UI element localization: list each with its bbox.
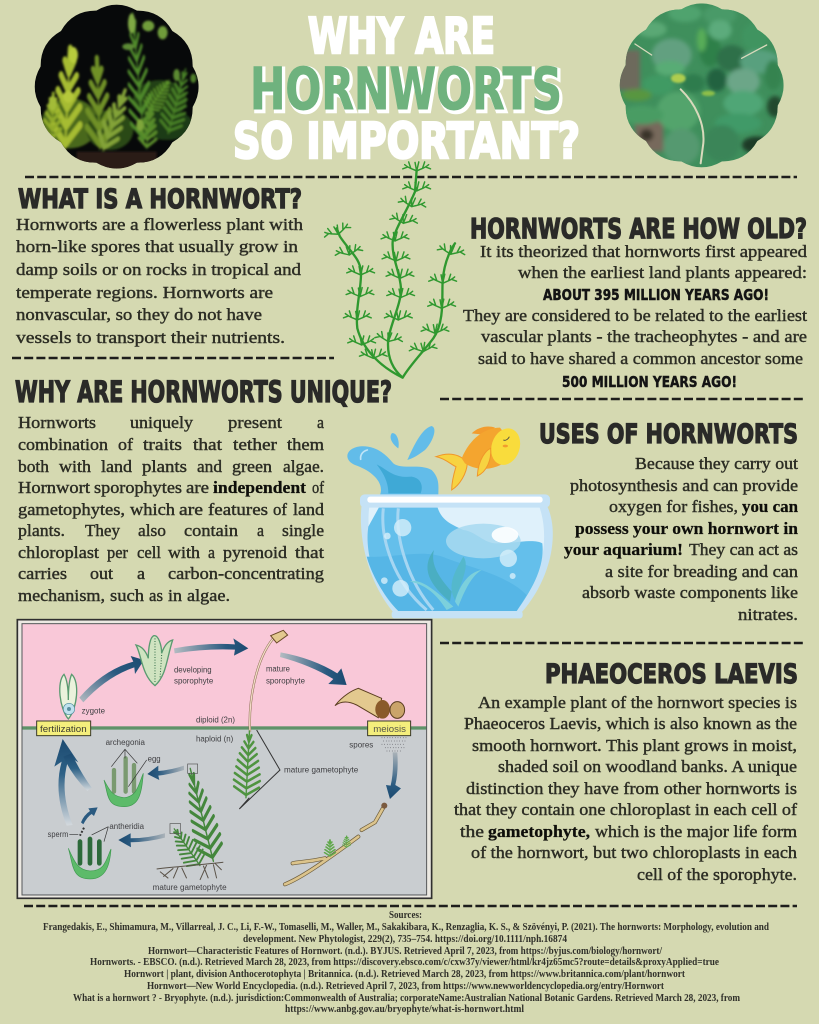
sources: What is a hornwort ? - Bryophyte. (n.d.). jurisdiction:Commonwealth of Australia; corporateName:Australian National Botanic Gardens. Retrieved March 28, 2023, from [73,993,741,1004]
body text: what is a hornwort: temperate regions. Hornworts are [16,283,273,302]
archegonia cup [104,749,147,807]
body text: what is a hornwort: Hornworts are a flowerless plant with [16,215,304,234]
panel: hornworts are how old [463,212,808,391]
body text: what is a hornwort [16,215,304,347]
stage label: meiosis [368,721,411,736]
photo: hornwort on black background [34,4,199,169]
body text: why are hornworts unique: of [118,435,133,454]
opened spore capsule [335,688,405,719]
panel: uses of hornworts [539,419,799,624]
body text: why are hornworts unique: a [137,564,145,583]
body text: why are hornworts unique: cell [137,543,161,562]
body text: what is a hornwort: horn-like spores that usually grow in [16,237,299,256]
body text: phaeoceros laevis [454,693,798,884]
title line: so important: SO IMPORTANT? [233,113,580,170]
body text: why are hornworts unique: also [138,521,166,540]
body text: why are hornworts unique: with [168,543,201,562]
diagram labels: mature [266,665,291,674]
mature sporophyte stalk and capsule [250,630,288,732]
body text: why are hornworts unique [18,413,325,605]
body text: why are hornworts unique: mechanism, [18,586,105,605]
diagram labels: sporophyte [174,676,214,685]
life-cycle arrows [54,638,401,847]
diagram labels: diploid (2n) [196,715,235,724]
body text: hornworts are how old: said to have shared a common ancestor some [478,349,803,368]
body text: why are hornworts unique: uniquely [130,413,194,432]
title line: hornworts: HORNWORTS [252,57,564,125]
body text: why are hornworts unique: sporophytes [94,478,182,497]
panel: why are hornworts unique [15,375,392,605]
sources: Hornworts. - EBSCO. (n.d.). Retrieved March 28, 2023, from https://discovery.ebsco.com/c/cxw37y/viewer/html/kr4jz65mc5?route=details&proxyApplied=true [90,957,720,968]
body text: uses of hornworts: Because they carry out [635,454,798,473]
body text: phaeoceros laevis: of the hornwort, but two chloroplasts in each [471,843,798,862]
diagram labels [48,665,373,892]
body text: hornworts are how old: vascular plants - the tracheophytes - and are [481,327,807,346]
body text: why are hornworts unique: of [273,500,287,519]
body text: why are hornworts unique: combination [18,435,109,454]
body text: phaeoceros laevis: which is the major life form [595,822,797,841]
diagram labels: haploid (n) [196,735,234,744]
diagram labels: mature gametophyte [284,765,359,774]
body text: why are hornworts unique: a [317,413,324,432]
title line: hornworts: HORNWORTS [250,55,562,123]
body text: why are hornworts unique: contain [184,521,239,540]
body text: why are hornworts unique: tether [233,435,277,454]
panel: phaeoceros laevis [454,659,798,884]
developing sporophyte [136,636,173,686]
sources: Hornwort—Characteristic Features of Hornwort. (n.d.). BYJUS. Retrieved April 7, 2023, from https://byjus.com/biology/hornwort/ [148,946,662,957]
body text: phaeoceros laevis: gametophyte, [488,822,590,841]
body text: why are hornworts unique: as [149,586,163,605]
body text: why are hornworts unique: which [130,500,176,519]
body text: phaeoceros laevis: shaded soil on woodland banks. A unique [498,757,797,776]
body text: uses of hornworts [564,454,799,624]
body text: why are hornworts unique: independent [213,478,306,497]
body text: what is a hornwort: vessels to transport their nutrients. [16,328,285,347]
body text: hornworts are how old: They are considered to be related to the earliest [463,306,807,325]
title line: why are: WHY ARE [308,8,495,65]
germinating spore and protonema [285,803,387,884]
body text: phaeoceros laevis: cell of the sporophyte. [637,865,797,884]
sources: https://www.anbg.gov.au/bryophyte/what-is-hornwort.html [285,1004,524,1015]
body text: uses of hornworts: possess your own hornwort in [575,519,799,538]
body text: why are hornworts unique: out [90,564,113,583]
body text: why are hornworts unique: them [287,435,324,454]
body text: phaeoceros laevis: distinction they have from other hornworts is [466,779,797,798]
body text: uses of hornworts: oxygen for fishes, [609,497,738,516]
body text: why are hornworts unique: traits [143,435,182,454]
body text: why are hornworts unique: green [232,457,273,476]
body text: why are hornworts unique: chloroplast [18,543,99,562]
sources: development. New Phytologist, 229(2), 735–754. https://doi.org/10.1111/nph.16874 [243,934,567,945]
diagram labels: mature gametophyte [153,883,227,892]
photo: liverwort-like green thallus [617,0,790,173]
body text: phaeoceros laevis: An example plant of the hornwort species is [478,693,797,712]
body text: why are hornworts unique: pyrenoid [223,543,288,562]
diagram labels: sporophyte [266,676,306,685]
body text: why are hornworts unique: carbon-concentrating [168,564,325,583]
body text: why are hornworts unique: are [186,478,209,497]
body text: what is a hornwort: nonvascular, so they do not have [16,305,262,324]
body text: why are hornworts unique: that [193,435,222,454]
heading: why are hornworts unique: WHY ARE HORNWORTS UNIQUE? [15,375,392,409]
body text: why are hornworts unique: of [312,478,324,497]
body text: why are hornworts unique: land [293,500,325,519]
mature gametophyte central [233,730,280,809]
body text: why are hornworts unique: gametophytes, [18,500,125,519]
body text: hornworts are how old [463,242,808,391]
icon: water splash [347,426,438,495]
body text: what is a hornwort: damp soils or on rocks in tropical and [16,260,302,279]
body text: why are hornworts unique: that [295,543,324,562]
body text: hornworts are how old: It its theorized that hornworts first appeared [480,242,808,261]
sources [43,910,769,1015]
body text: why are hornworts unique: plants [142,457,187,476]
body text: why are hornworts unique: are [179,500,203,519]
diagram labels: sperm [48,830,69,839]
body text: why are hornworts unique: with [59,457,92,476]
body text: why are hornworts unique: a [257,521,264,540]
heading: what is a hornwort: WHAT IS A HORNWORT? [18,184,302,215]
body text: why are hornworts unique: features [208,500,268,519]
body text: phaeoceros laevis: smooth hornwort. This plant grows in moist, [472,736,797,755]
body text: uses of hornworts: your aquarium! [564,540,683,559]
body text: uses of hornworts: absorb waste components like [582,583,798,602]
icon: goldfish [436,425,525,490]
section dividers [12,177,805,906]
body text: why are hornworts unique: and [197,457,223,476]
body text: uses of hornworts: photosynthesis and can provide [570,476,798,495]
diagram labels: antheridia [109,822,145,831]
body text: why are hornworts unique: algae. [283,457,324,476]
body text: why are hornworts unique: both [18,457,50,476]
body text: why are hornworts unique: plants. [18,521,65,540]
body text: why are hornworts unique: algae. [187,586,230,605]
stage label: fertilization: fertilization [40,724,87,734]
antheridia cup [68,827,111,879]
stage label: meiosis: meiosis [373,724,406,734]
body text: why are hornworts unique: present [228,413,282,432]
diagram labels: spores [349,740,373,749]
sources: Hornwort—New World Encyclopedia. (n.d.). Retrieved April 7, 2023, from https://www.newworldencyclopedia.org/entry/Hornwort [147,981,665,992]
body text: phaeoceros laevis: Phaeoceros Laevis, which is also known as the [464,714,797,733]
panel: what is a hornwort [16,184,304,347]
body text: phaeoceros laevis: the [460,822,484,841]
body text: uses of hornworts: They can act as [689,540,798,559]
body text: phaeoceros laevis: that they contain one chloroplast in each cell of [454,800,797,819]
diagram labels: zygote [82,707,106,716]
sources: Hornwort | plant, division Anthocerotophyta | Britannica. (n.d.). Retrieved March 28, 2023, from https://www.britannica.com/plant/hornwort [124,969,686,980]
body text: why are hornworts unique: They [85,521,120,540]
mature gametophyte with roots [157,764,226,880]
sources: Sources: [389,910,422,921]
body text: uses of hornworts: a site for breading and can [605,562,799,581]
body text: why are hornworts unique: Hornwort [18,478,90,497]
body text: uses of hornworts: nitrates. [738,605,798,624]
body text: why are hornworts unique: such [110,586,145,605]
body text: why are hornworts unique: in [168,586,183,605]
diagram labels: developing [174,665,212,674]
body text: why are hornworts unique: land [101,457,133,476]
diagram labels: archegonia [106,738,146,747]
body text: uses of hornworts: you can [742,497,799,516]
diagram labels: egg [148,755,161,764]
title [233,8,580,170]
chart: hornwort life cycle diagram [17,620,432,898]
stage label: fertilization [37,721,91,736]
spores [382,738,408,751]
body text: why are hornworts unique: a [208,543,215,562]
icon: fishbowl [360,494,553,618]
sources: Frangedakis, E., Shimamura, M., Villarreal, J. C., Li, F.-W., Tomaselli, M., Waller, M., Sakakibara, K., Renzaglia, K. S., & Szövényi, P. (2021). The hornworts: Morphology, evolution and [43,922,769,933]
body text: hornworts are how old: 500 MILLION YEARS AGO! [562,373,737,391]
body text: why are hornworts unique: Hornworts [18,413,96,432]
body text: why are hornworts unique: carries [18,564,67,583]
body text: hornworts are how old: when the earliest land plants appeared: [518,263,807,282]
diagram frame [17,620,432,898]
zygote [60,674,77,719]
illustration: goldfish jumping from bowl [347,425,553,618]
body text: why are hornworts unique: single [282,521,324,540]
body text: why are hornworts unique: per [107,543,128,562]
illustration: green hornwort sprigs [322,162,466,378]
